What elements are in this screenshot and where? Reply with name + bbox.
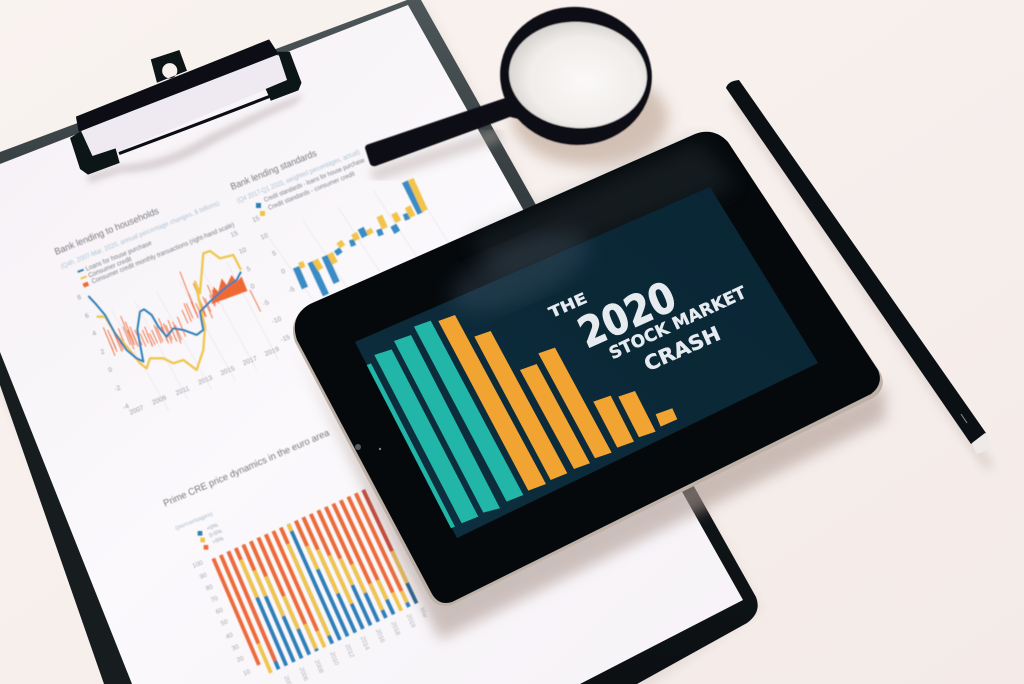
icon: magnifying glass xyxy=(365,0,668,176)
y axis labels xyxy=(192,559,252,677)
x axis labels: 2019 xyxy=(405,613,417,629)
x axis labels xyxy=(282,606,429,684)
legend: Consumer credit xyxy=(87,256,133,280)
axis labels: -5 xyxy=(288,286,296,295)
x axis labels: 2010 xyxy=(328,651,340,667)
tablet screen xyxy=(355,187,818,538)
stacked bars xyxy=(213,490,417,673)
clipboard board xyxy=(0,0,758,684)
y axis labels: 40 xyxy=(225,632,234,641)
x axis labels: 2008 xyxy=(313,659,325,675)
chart grid xyxy=(268,178,450,310)
panel: clipboard xyxy=(0,0,762,684)
axis labels: 6 xyxy=(84,312,90,320)
red monthly spikes xyxy=(103,272,261,356)
legend: <0% xyxy=(206,523,219,533)
legend: Credit standards - loans for house purchase xyxy=(263,157,366,204)
x axis labels: Mar xyxy=(418,606,429,619)
clip shadow xyxy=(86,93,304,183)
magnifier lens xyxy=(505,17,651,133)
tablet body xyxy=(295,132,880,603)
axis labels: 2013 xyxy=(197,374,214,387)
axis labels: 10 xyxy=(260,232,269,242)
legend: 0-5% xyxy=(208,529,223,539)
blue line xyxy=(88,272,241,362)
axis labels: 2015 xyxy=(220,365,236,377)
axis labels: 2009 xyxy=(151,394,168,407)
bars xyxy=(251,179,425,295)
y axis labels: 60 xyxy=(215,607,224,616)
axis labels: -15 xyxy=(280,334,291,344)
axis labels: -2 xyxy=(114,384,122,393)
y axis labels: 20 xyxy=(236,655,245,664)
legend: Credit standards - consumer credit xyxy=(267,170,356,212)
tablet reflection xyxy=(470,140,735,280)
magnifier rim xyxy=(493,0,659,153)
x axis labels: 2006 xyxy=(297,666,309,683)
y axis labels: 50 xyxy=(220,618,229,627)
headline: 2020: 2020 xyxy=(571,272,683,358)
clip wire xyxy=(119,97,269,154)
axis labels: -4 xyxy=(122,403,130,412)
legend: (percentages) xyxy=(174,511,214,532)
chart: bank lending to households xyxy=(53,200,291,417)
chart: Prime CRE price dynamics xyxy=(162,427,429,684)
axis labels: 2019 xyxy=(264,346,281,358)
axis labels: 0 xyxy=(250,283,256,291)
clipboard shadow xyxy=(0,4,762,684)
chart subtitle: (Q4h. 2007-Mar. 2020, annual percentage changes, $ billions) xyxy=(60,200,221,271)
axis labels: 2011 xyxy=(175,385,191,397)
chart title: Bank lending to households xyxy=(53,206,161,257)
axis labels: 0 xyxy=(280,268,287,276)
x axis labels: 2012 xyxy=(343,643,355,659)
y axis labels: 100 xyxy=(192,559,204,570)
orange bars xyxy=(438,315,677,491)
tablet shadow xyxy=(296,345,885,640)
axis labels: 2017 xyxy=(242,355,259,367)
axis labels: -5 xyxy=(262,299,270,308)
axis labels: 8 xyxy=(76,294,83,302)
pencil eraser xyxy=(972,433,992,454)
y axis labels: 10 xyxy=(242,668,252,677)
screen headline xyxy=(546,272,750,376)
magnifier handle xyxy=(365,92,530,166)
yellow line xyxy=(97,251,241,370)
axis labels: 2007 xyxy=(129,404,145,417)
x axis labels: 2018 xyxy=(389,621,401,637)
bar chart on screen xyxy=(367,315,677,528)
x axis labels: 2014 xyxy=(359,635,371,652)
panel: printed charts on the paper xyxy=(53,148,450,684)
axis labels: -10 xyxy=(271,315,283,326)
handle shadow xyxy=(372,134,500,176)
axis labels: 0 xyxy=(107,366,114,374)
magnifier shadow xyxy=(512,70,668,166)
axis labels: 4 xyxy=(91,330,98,338)
clip right arm xyxy=(266,52,302,101)
camera dots xyxy=(355,444,381,450)
paper sheet xyxy=(0,5,743,684)
chart subtitle: (Q4 2017-Q1 2020, weighted percentages, actual) xyxy=(236,149,361,205)
clip window xyxy=(81,52,288,157)
pencil shadow xyxy=(735,100,990,468)
axis labels xyxy=(251,215,296,295)
headline: STOCK MARKET: STOCK MARKET xyxy=(606,283,750,364)
teal bars xyxy=(367,321,523,528)
chart title: Prime CRE price dynamics in the euro area xyxy=(162,427,332,509)
headline: THE: THE xyxy=(546,289,590,322)
chart title: Bank lending standards xyxy=(229,148,319,193)
axis labels: 2 xyxy=(100,348,106,356)
axis labels: 15 xyxy=(230,230,239,239)
tablet edge xyxy=(293,135,883,606)
legend xyxy=(256,157,366,216)
axis labels: 5 xyxy=(246,266,252,274)
x axis labels: 2016 xyxy=(374,628,386,644)
chart: bank lending standards xyxy=(229,148,450,310)
clip top bar xyxy=(76,39,279,132)
panel: tablet xyxy=(293,132,885,640)
y axis labels: 70 xyxy=(210,595,219,604)
orange monthly fill xyxy=(212,275,248,304)
screen glare xyxy=(440,216,600,328)
pencil print xyxy=(961,414,967,423)
legend xyxy=(174,511,225,550)
icon: pencil xyxy=(726,80,992,468)
pencil body xyxy=(726,80,986,444)
axis labels: 15 xyxy=(251,215,261,224)
clip tab xyxy=(151,50,187,83)
y axis labels: 30 xyxy=(231,643,240,652)
icon: binder clip xyxy=(70,39,304,183)
headline: CRASH: CRASH xyxy=(640,321,724,376)
y axis labels: 90 xyxy=(199,572,208,581)
chart grid xyxy=(112,262,278,410)
legend: >5% xyxy=(212,536,225,546)
legend: Loans for house purchase xyxy=(85,240,153,273)
axis labels: 5 xyxy=(271,250,278,258)
legend: Consumer credit monthly transactions (right-hand scale) xyxy=(91,222,236,286)
axis labels xyxy=(76,230,291,417)
left board edge xyxy=(0,352,132,684)
clip left arm xyxy=(70,131,120,175)
axis labels: 10 xyxy=(238,247,248,256)
y axis labels: 80 xyxy=(205,583,214,592)
